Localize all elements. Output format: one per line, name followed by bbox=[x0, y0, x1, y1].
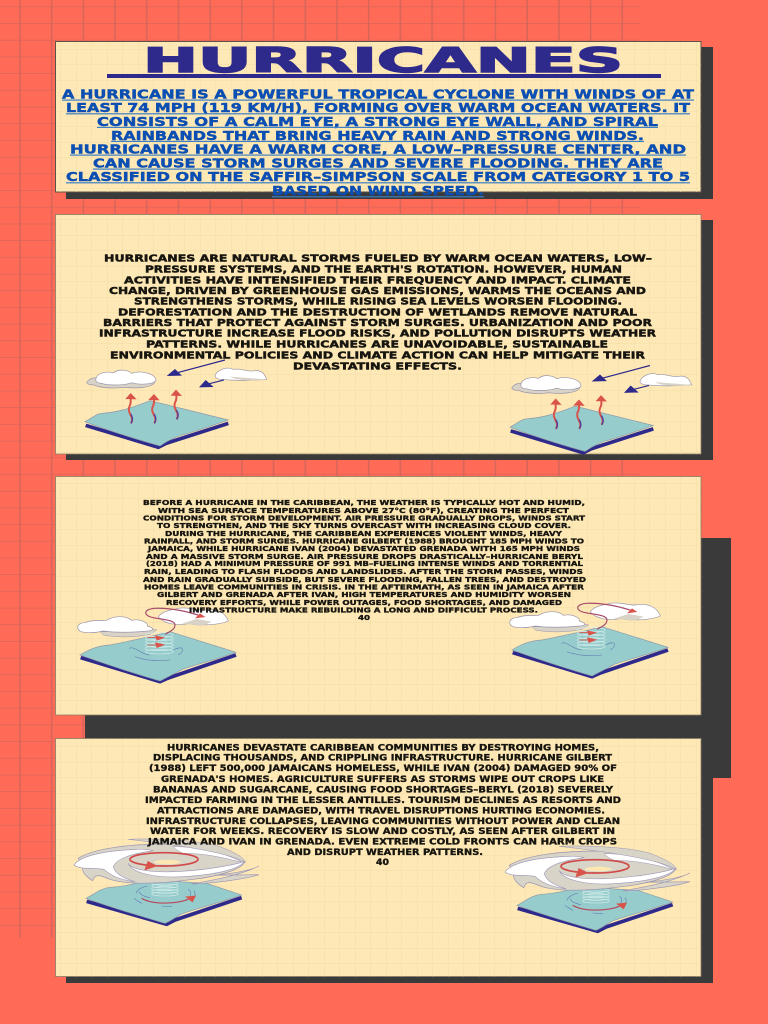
timeline text block: TO STRENGTHEN, AND THE SKY TURNS OVERCAST WITH INCREASING CLOUD COVER. bbox=[157, 521, 571, 530]
impacts text block: IMPACTED FARMING IN THE LESSER ANTILLES. TOURISM DECLINES AS RESORTS AND bbox=[145, 796, 621, 806]
timeline text block: INFRASTRUCTURE MAKE REBUILDING A LONG AND DIFFICULT PROCESS. bbox=[189, 606, 538, 614]
impacts text block: 40 bbox=[376, 858, 389, 868]
impacts text block: BANANAS AND SUGARCANE, CAUSING FOOD SHORTAGES–BERYL (2018) SEVERELY bbox=[153, 786, 614, 796]
icon: full hurricane left bbox=[74, 839, 259, 924]
timeline text block: (2018) HAD A MINIMUM PRESSURE OF 991 MB–FUELING INTENSE WINDS AND TORRENTIAL bbox=[146, 559, 583, 568]
impacts text block: DISPLACING THOUSANDS, AND CRIPPLING INFRASTRUCTURE. HURRICANE GILBERT bbox=[153, 754, 612, 764]
causes text block: DEVASTATING EFFECTS. bbox=[293, 361, 462, 372]
intro text block: BASED ON WIND SPEED. bbox=[272, 184, 484, 198]
causes text block: STRENGTHENS STORMS, WHILE RISING SEA LEVELS WORSEN FLOODING. bbox=[134, 297, 622, 308]
causes text block: CHANGE, DRIVEN BY GREENHOUSE GAS EMISSIONS, WARMS THE OCEANS AND bbox=[109, 286, 646, 297]
timeline text block: WITH SEA SURFACE TEMPERATURES ABOVE 27°C (80°F), CREATING THE PERFECT bbox=[158, 506, 569, 515]
timeline text block: CONDITIONS FOR STORM DEVELOPMENT. AIR PRESSURE GRADUALLY DROPS, WINDS START bbox=[143, 514, 585, 522]
impacts text block: HURRICANES DEVASTATE CARIBBEAN COMMUNITIES BY DESTROYING HOMES, bbox=[167, 744, 599, 754]
timeline text block: RAIN, LEADING TO FLASH FLOODS AND LANDSLIDES. AFTER THE STORM PASSES, WINDS bbox=[144, 567, 583, 576]
timeline text block: AND A MASSIVE STORM SURGE. AIR PRESSURE DROPS DRASTICALLY–HURRICANE BERYL bbox=[146, 552, 583, 561]
causes text block: INFRASTRUCTURE INCREASE FLOOD RISKS, AND POLLUTION DISRUPTS WEATHER bbox=[99, 329, 657, 340]
causes text block: BARRIERS THAT PROTECT AGAINST STORM SURGES. URBANIZATION AND POOR bbox=[103, 318, 653, 329]
timeline text block: RECOVERY EFFORTS, WHILE POWER OUTAGES, FOOD SHORTAGES, AND DAMAGED bbox=[166, 598, 562, 607]
timeline text block: AND RAIN GRADUALLY SUBSIDE, BUT SEVERE FLOODING, FALLEN TREES, AND DESTROYED bbox=[143, 575, 586, 584]
causes text block: ACTIVITIES HAVE INTENSIFIED THEIR FREQUENCY AND IMPACT. CLIMATE bbox=[124, 275, 631, 286]
timeline text block: DURING THE HURRICANE, THE CARIBBEAN EXPERIENCES VIOLENT WINDS, HEAVY bbox=[165, 529, 563, 538]
causes text block: PRESSURE SYSTEMS, AND THE EARTH'S ROTATION. HOWEVER, HUMAN bbox=[145, 264, 622, 275]
causes text block: DEFORESTATION AND THE DESTRUCTION OF WETLANDS REMOVE NATURAL bbox=[118, 307, 637, 318]
panel: before during after bbox=[56, 476, 731, 778]
impacts text block bbox=[145, 744, 621, 868]
intro text block: CONSISTS OF A CALM EYE, A STRONG EYE WALL, AND SPIRAL bbox=[97, 115, 658, 129]
timeline text block: 40 bbox=[358, 613, 370, 622]
timeline text block: GILBERT AND GRENADA AFTER IVAN, HIGH TEMPERATURES AND HUMIDITY WORSEN bbox=[157, 590, 571, 599]
timeline text block: JAMAICA, WHILE HURRICANE IVAN (2004) DEVASTATED GRENADA WITH 165 MPH WINDS bbox=[147, 544, 580, 553]
icon: storm forming right bbox=[510, 603, 668, 677]
intro text block: HURRICANES HAVE A WARM CORE, A LOW–PRESSURE CENTER, AND bbox=[70, 142, 686, 156]
icon: warm water evaporating right bbox=[510, 365, 692, 453]
causes text block: PATTERNS. WHILE HURRICANES ARE UNAVOIDABLE, SUSTAINABLE bbox=[146, 339, 608, 350]
intro text block: CAN CAUSE STORM SURGES AND SEVERE FLOODING. THEY ARE bbox=[93, 156, 663, 170]
intro text block: CLASSIFIED ON THE SAFFIR–SIMPSON SCALE FROM CATEGORY 1 TO 5 bbox=[66, 170, 690, 184]
impacts text block: AND DISRUPT WEATHER PATTERNS. bbox=[287, 848, 483, 858]
intro text block bbox=[62, 88, 695, 198]
causes text block: ENVIRONMENTAL POLICIES AND CLIMATE ACTION CAN HELP MITIGATE THEIR bbox=[110, 351, 646, 362]
timeline text block: HOMES LEAVE COMMUNITIES IN CRISIS. IN THE AFTERMATH, AS SEEN IN JAMAICA AFTER bbox=[144, 582, 584, 592]
impacts text block: ATTRACTIONS ARE DAMAGED, WITH TRAVEL DISRUPTIONS HURTING ECONOMIES. bbox=[157, 806, 605, 816]
panel: causes bbox=[56, 214, 713, 460]
impacts text block: GRENADA'S HOMES. AGRICULTURE SUFFERS AS STORMS WIPE OUT CROPS LIKE bbox=[161, 775, 604, 785]
impacts text block: (1988) LEFT 500,000 JAMAICANS HOMELESS, WHILE IVAN (2004) DAMAGED 90% OF bbox=[149, 764, 617, 774]
impacts text block: WATER FOR WEEKS. RECOVERY IS SLOW AND COSTLY, AS SEEN AFTER GILBERT IN bbox=[150, 827, 615, 837]
impacts text block: INFRASTRUCTURE COLLAPSES, LEAVING COMMUNITIES WITHOUT POWER AND CLEAN bbox=[146, 817, 620, 827]
intro text block: RAINBANDS THAT BRING HEAVY RAIN AND STRONG WINDS. bbox=[111, 129, 644, 143]
causes text block: HURRICANES ARE NATURAL STORMS FUELED BY WARM OCEAN WATERS, LOW– bbox=[104, 254, 652, 265]
panel: introduction bbox=[56, 41, 713, 199]
timeline text block: RAINFALL, AND STORM SURGES. HURRICANE GILBERT (1988) BROUGHT 185 MPH WINDS TO bbox=[144, 536, 584, 546]
intro text block: LEAST 74 MPH (119 KM/H), FORMING OVER WARM OCEAN WATERS. IT bbox=[66, 101, 691, 115]
title: HURRICANES bbox=[143, 41, 623, 81]
timeline text block bbox=[143, 498, 586, 622]
timeline text block: BEFORE A HURRICANE IN THE CARIBBEAN, THE WEATHER IS TYPICALLY HOT AND HUMID, bbox=[143, 498, 585, 507]
icon: storm forming left bbox=[78, 608, 236, 682]
intro text block: A HURRICANE IS A POWERFUL TROPICAL CYCLONE WITH WINDS OF AT bbox=[62, 88, 695, 102]
causes text block bbox=[99, 254, 657, 372]
panel: impacts bbox=[56, 738, 713, 983]
impacts text block: JAMAICA AND IVAN IN GRENADA. EVEN EXTREME COLD FRONTS CAN HARM CROPS bbox=[147, 838, 617, 848]
icon: warm water evaporating left bbox=[85, 360, 267, 447]
title bbox=[107, 41, 661, 81]
icon: full hurricane right bbox=[505, 846, 690, 931]
